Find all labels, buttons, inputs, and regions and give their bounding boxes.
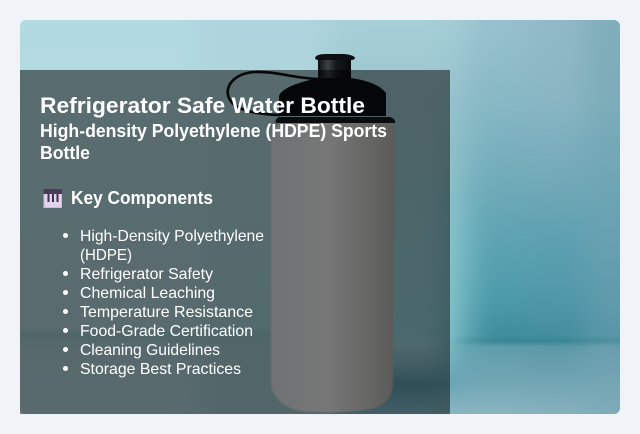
list item: storage best practices: Storage Best Practices — [80, 361, 241, 378]
subtitle: Bottle — [40, 143, 90, 163]
list item: HDPE: High-Density Polyethylene — [80, 228, 264, 245]
subtitle — [40, 121, 387, 163]
bottle — [228, 54, 395, 413]
bottle cap — [275, 54, 395, 123]
subtitle: High-density Polyethylene (HDPE) Sports — [40, 121, 387, 141]
key components list — [63, 228, 264, 378]
list item: temperature resistance: Temperature Resistance — [80, 304, 253, 321]
dark text panel — [20, 70, 450, 414]
list item: chemical leaching: Chemical Leaching — [80, 285, 215, 302]
title: Refrigerator Safe Water Bottle — [40, 93, 365, 118]
icon: piano keys — [44, 189, 62, 208]
section heading: key components: Key Components — [71, 187, 213, 208]
list item: refrigerator safety: Refrigerator Safety — [80, 266, 213, 283]
bottle strap — [228, 72, 320, 115]
list item: HDPE — [63, 228, 264, 264]
list item: HDPE: (HDPE) — [80, 247, 132, 264]
bottle body — [271, 122, 395, 413]
list item: cleaning guidelines: Cleaning Guidelines — [80, 342, 220, 359]
list item: food-grade certification: Food-Grade Certification — [80, 323, 253, 340]
